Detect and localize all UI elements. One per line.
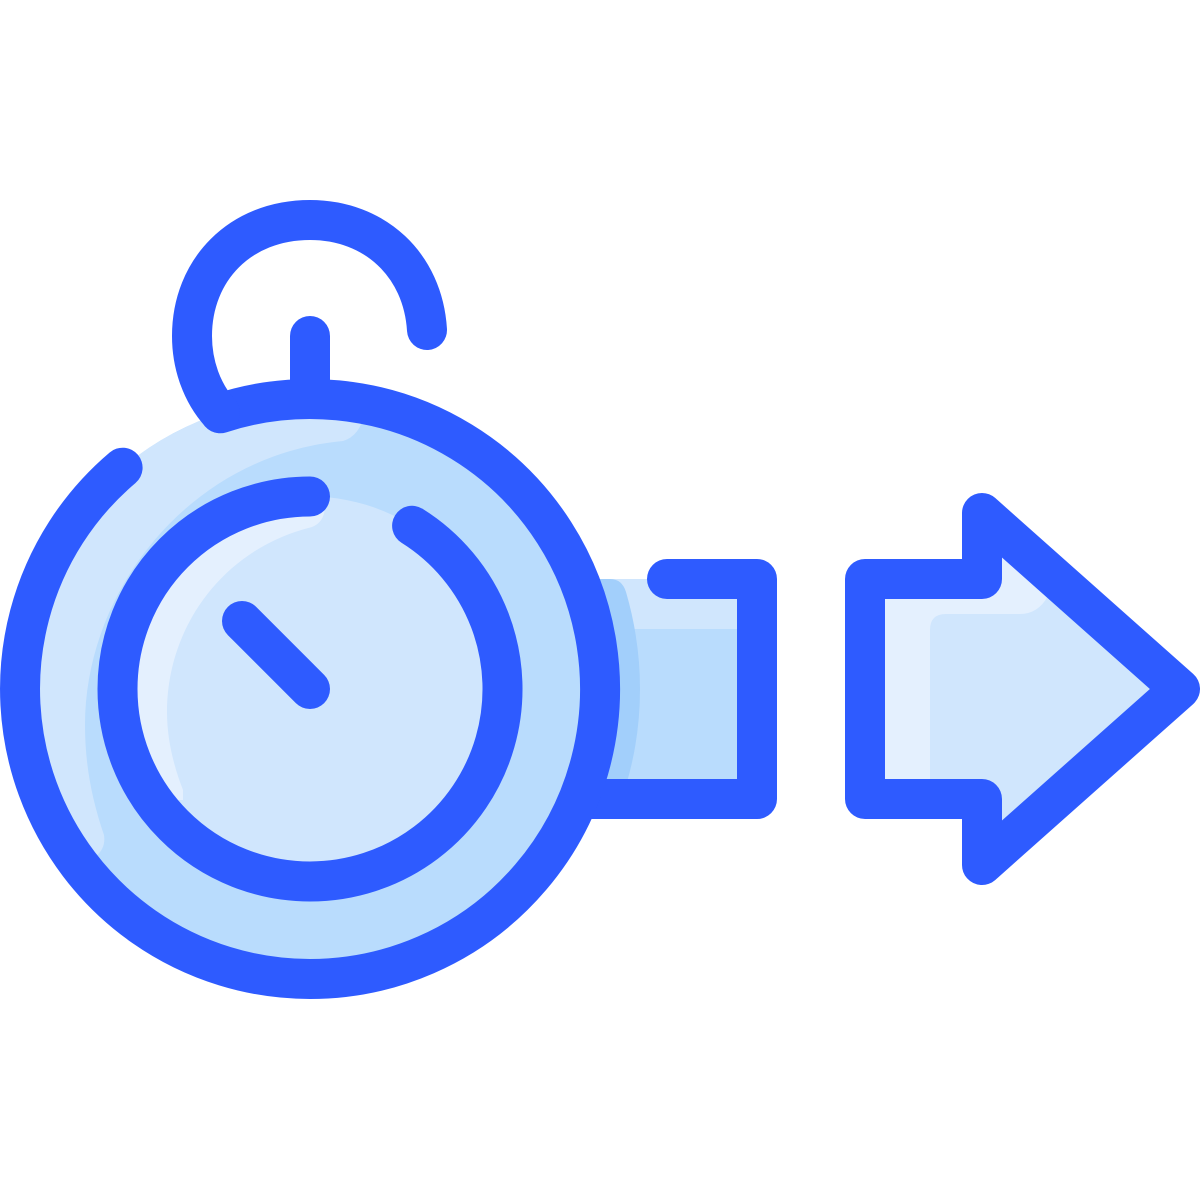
- icon: stopwatch with forward arrow: [0, 200, 1200, 999]
- stopwatch inner dial: [138, 498, 482, 862]
- outer ring: [20, 399, 600, 979]
- icon: stopwatch: [0, 220, 620, 999]
- crown stem: [290, 336, 330, 395]
- icon: bar behind the stopwatch: [590, 579, 757, 799]
- icon: right arrow: [865, 513, 1180, 865]
- crown loop: [192, 220, 427, 413]
- clock hand: [242, 621, 310, 689]
- stopwatch outer disc: [40, 419, 580, 959]
- inner ring: [117, 496, 503, 882]
